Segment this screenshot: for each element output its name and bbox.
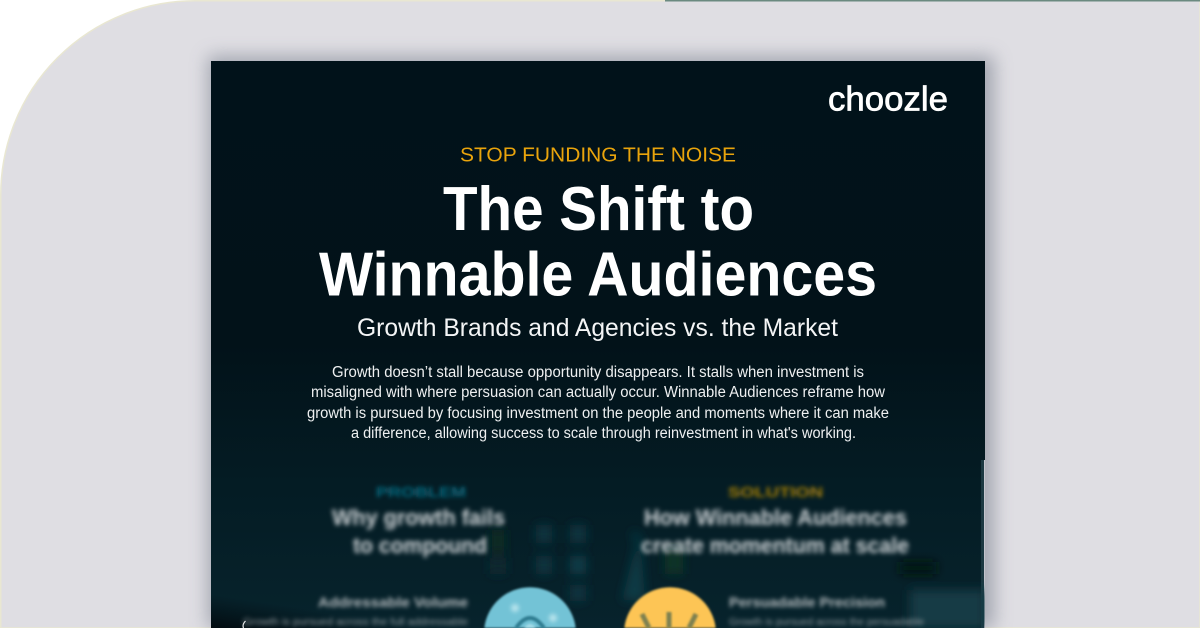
icon: yellow circle	[624, 587, 716, 628]
solution heading	[641, 505, 909, 558]
problem heading	[332, 505, 505, 558]
solution column	[624, 484, 924, 628]
logo: choozle: choozle	[828, 80, 948, 118]
infographic card	[211, 61, 985, 628]
kicker: STOP FUNDING THE NOISE	[460, 144, 736, 166]
title: The Shift to	[443, 175, 754, 244]
intro paragraph	[307, 364, 889, 442]
dark bottom-left corner	[211, 606, 355, 628]
addressable volume heading: Addressable Volume	[318, 594, 468, 610]
problem label: PROBLEM	[376, 484, 466, 501]
intro paragraph: growth is pursued by focusing investment on the people and moments where it can make	[307, 405, 889, 422]
intro paragraph: Growth doesn’t stall because opportunity disappears. It stalls when investment is	[332, 364, 864, 381]
icon: blue circle	[484, 587, 576, 628]
addressable volume text: Growth is pursued across the full addressable	[243, 617, 468, 628]
title	[319, 185, 875, 296]
intro paragraph: a difference, allowing success to scale through reinvestment in what's working.	[351, 425, 856, 442]
persuadable precision text: Growth is pursued across the persuadable	[729, 617, 924, 628]
intro paragraph: misaligned with where persuasion can actually occur. Winnable Audiences reframe how	[311, 384, 886, 401]
title: Winnable Audiences	[319, 240, 877, 310]
card shadow	[208, 56, 994, 628]
blurred background shapes	[490, 525, 985, 628]
solution heading: create momentum at scale	[641, 533, 909, 558]
small white mark	[243, 621, 246, 628]
subtitle: Growth Brands and Agencies vs. the Market	[357, 314, 838, 342]
problem heading: to compound	[353, 533, 487, 558]
solution label: SOLUTION	[728, 484, 823, 501]
persuadable precision heading: Persuadable Precision	[729, 594, 885, 610]
solution heading: How Winnable Audiences	[644, 505, 907, 530]
problem column	[243, 484, 576, 628]
problem heading: Why growth fails	[332, 505, 505, 530]
